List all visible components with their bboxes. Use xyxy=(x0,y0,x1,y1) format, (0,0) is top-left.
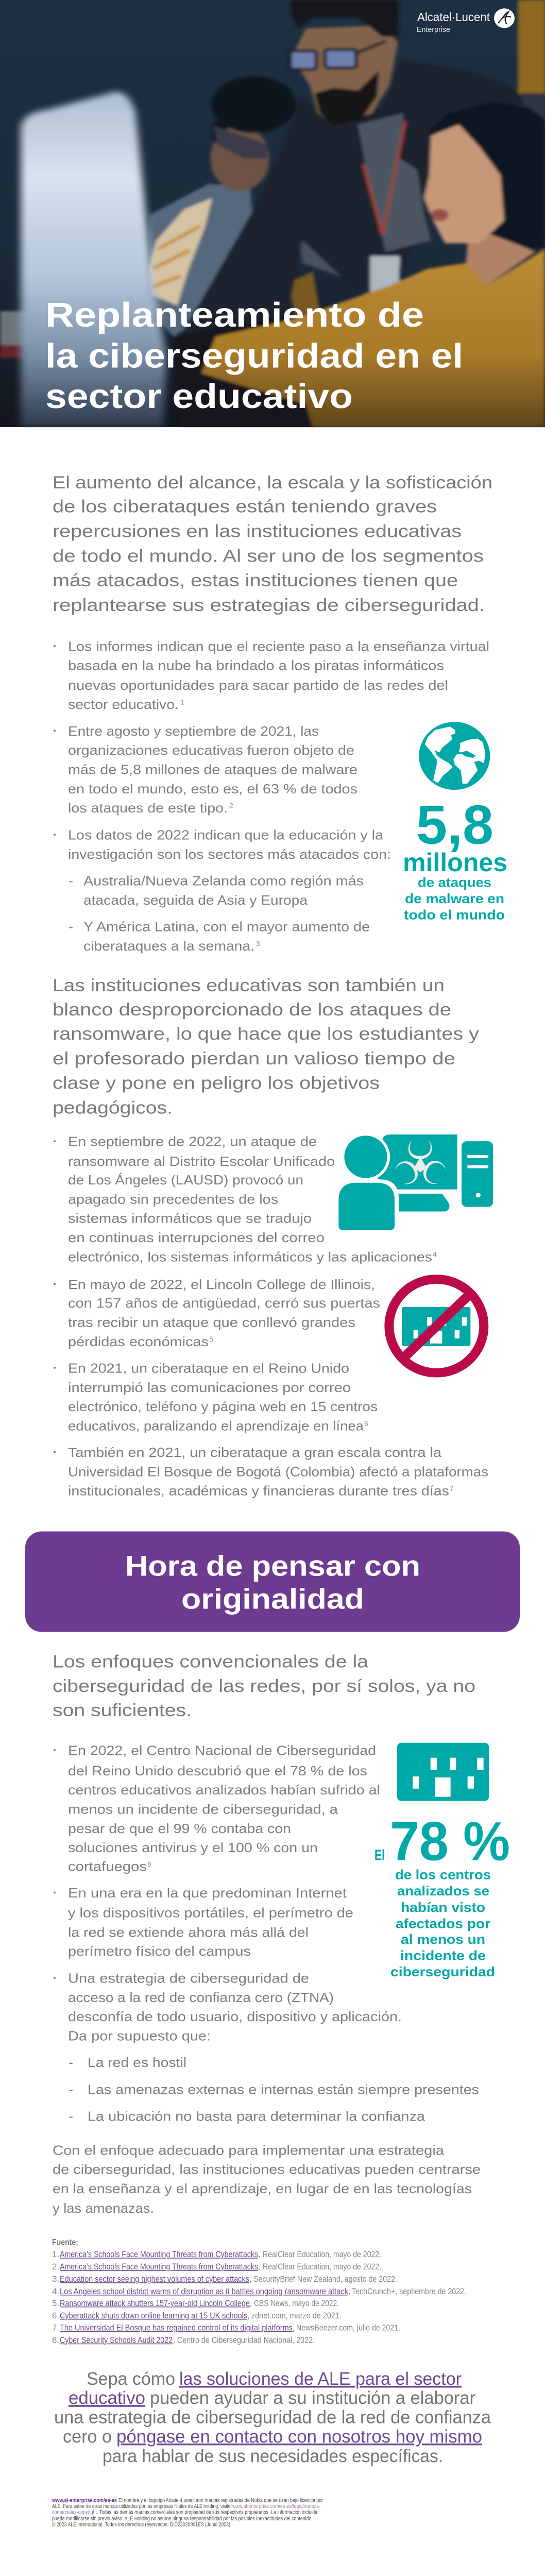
bullet list: zero trust: En 2022, el Centro Nacional de Ciberseguridad xyxy=(68,1743,376,1758)
bullet list: zero trust: del Reino Unido descubrió que el 78 % de los xyxy=(68,1763,367,1778)
stat: 78 %: de los centros xyxy=(395,1867,491,1883)
bullet list: ransomware cases: tras recibir un ataque que conllevó grandes xyxy=(68,1315,355,1330)
call to action: las soluciones de ALE para el sector xyxy=(179,2368,462,2389)
bullet list: attack statistics: ciberataques a la semana. xyxy=(83,938,254,954)
bullet list: zero trust: desconfía de todo usuario, dispositivo y aplicación. xyxy=(68,2009,402,2024)
bullet list: ransomware cases: con 157 años de antigüedad, cerró sus puertas xyxy=(68,1296,380,1311)
stat: 5,8 millones: de ataques xyxy=(418,875,491,890)
bullet list: ransomware cases: Universidad El Bosque de Bogotá (Colombia) afectó a plataformas xyxy=(68,1464,488,1479)
bullet list: zero trust: Las amenazas externas e internas están siempre presentes xyxy=(88,2082,479,2097)
stat: 78 % xyxy=(374,1811,510,1979)
sources list: 7. xyxy=(52,2323,59,2333)
closing paragraph: Con el enfoque adecuado para implementar una estrategia xyxy=(53,2143,444,2158)
section intro: conventional approaches: ciberseguridad de las redes, por sí solos, ya no xyxy=(53,1676,475,1696)
sources list: Cyber Security Schools Audit 2022 xyxy=(60,2335,173,2345)
stat: 78 %: afectados por xyxy=(396,1916,490,1931)
logo: Alcatel-Lucent Enterprise xyxy=(417,8,515,34)
sources list: 6. xyxy=(52,2311,59,2320)
bullet list: zero trust: centros educativos analizados habían sufrido al xyxy=(68,1783,380,1798)
call to action: para hablar de sus necesidades específicas. xyxy=(103,2446,443,2466)
bullet list: ransomware cases: En septiembre de 2022, un ataque de xyxy=(68,1134,317,1149)
bullet list: ransomware cases: En mayo de 2022, el Lincoln College de Illinois, xyxy=(68,1277,375,1292)
sources list: 1. xyxy=(52,2250,59,2259)
bullet list: ransomware cases: apagado sin precedentes de los xyxy=(68,1192,278,1207)
footer legal text: ALE. Para saber de otras marcas utilizadas por las empresas filiales de ALE holding, visite: xyxy=(52,2503,232,2510)
bullet list: zero trust: - xyxy=(69,2082,73,2097)
stat: 78 %: analizados se xyxy=(397,1884,489,1899)
bullet list: zero trust: 8 xyxy=(147,1860,151,1868)
bullet list: zero trust: La red es hostil xyxy=(88,2055,186,2070)
stat: 5,8 millones xyxy=(403,794,507,922)
bullet list: ransomware cases: institucionales, académicas y financieras durante tres días xyxy=(68,1483,449,1499)
sources list: NewsBeezer.com, julio de 2021. xyxy=(296,2323,400,2333)
bullet list: attack statistics: 3 xyxy=(256,940,260,947)
intro paragraph: más atacados, estas instituciones tienen que xyxy=(53,571,458,590)
bullet list: ransomware cases: También en 2021, un ciberataque a gran escala contra la xyxy=(68,1445,441,1460)
bullet list: zero trust: En una era en la que predominan Internet xyxy=(68,1886,347,1901)
call to action: pueden ayudar a su institución a elaborar xyxy=(150,2387,475,2408)
bullet list: ransomware cases: interrumpió las comunicaciones por correo xyxy=(68,1380,351,1395)
intro paragraph: repercusiones en las instituciones educativas xyxy=(53,521,462,541)
banner: Hora de pensar con originalidad: Hora de pensar con xyxy=(125,1551,420,1582)
bullet list: attack statistics: Los informes indican que el reciente paso a la enseñanza virtual xyxy=(68,639,489,654)
sources list: zdnet.com, marzo de 2021. xyxy=(251,2311,342,2320)
footer legal text: puede modificarse sin previo aviso. ALE Holding no asume ninguna responsabilidad por las posibles inexactitudes del contenido. xyxy=(52,2515,313,2522)
intro paragraph xyxy=(53,472,492,615)
stat: 78 %: ciberseguridad xyxy=(390,1964,495,1979)
logo: Alcatel-Lucent Enterprise: Enterprise xyxy=(417,26,450,34)
stat: 5,8 millones: 5,8 xyxy=(416,794,493,856)
sources list: The Universidad El Bosque has regained control of its digital platforms, xyxy=(60,2323,295,2333)
section intro: ransomware: pedagógicos. xyxy=(53,1098,173,1117)
bullet list: attack statistics: - xyxy=(69,873,73,888)
bullet list: attack statistics: nuevas oportunidades para sacar partido de las redes del xyxy=(68,677,448,693)
bullet list: zero trust: menos un incidente de ciberseguridad, a xyxy=(68,1802,338,1817)
bullet list: zero trust: - xyxy=(69,2109,73,2124)
closing paragraph: de ciberseguridad, las instituciones educativas pueden centrarse xyxy=(53,2162,481,2177)
sources list: Ransomware attack shutters 157-year-old Lincoln College, xyxy=(60,2298,252,2308)
bullet list: ransomware cases: sistemas informáticos que se tradujo xyxy=(68,1211,312,1226)
bullet list: attack statistics: en todo el mundo, esto es, el 63 % de todos xyxy=(68,781,357,796)
section intro: ransomware: Las instituciones educativas son también un xyxy=(53,976,445,995)
bullet list: ransomware cases: pérdidas económicas xyxy=(68,1334,209,1349)
bullet list: ransomware cases: de Los Ángeles (LAUSD) provocó un xyxy=(68,1173,303,1188)
logo: Alcatel-Lucent Enterprise: Alcatel·Lucent xyxy=(417,11,490,24)
section intro: ransomware: clase y pone en peligro los objetivos xyxy=(53,1073,380,1093)
bullet list: attack statistics: - xyxy=(69,919,73,934)
bullet list: attack statistics xyxy=(54,639,489,954)
title xyxy=(45,295,463,416)
call to action: educativo xyxy=(69,2387,145,2408)
footer legal text: El nombre y el logotipo Alcatel-Lucent son marcas registradas de Nokia que se usan bajo licencia por xyxy=(118,2497,323,2503)
bullet list: ransomware cases: 6 xyxy=(364,1420,368,1428)
stat: 5,8 millones: de malware en xyxy=(405,891,504,906)
bullet list: attack statistics: Australia/Nueva Zelanda como región más xyxy=(83,873,364,888)
footer legal text: www.al-enterprise.com/es-es xyxy=(52,2497,117,2503)
sources list: 3. xyxy=(52,2274,59,2284)
sources list: RealClear Education, mayo de 2022. xyxy=(263,2262,381,2272)
bullet list: ransomware cases: educativos, paralizando el aprendizaje en línea xyxy=(68,1418,364,1433)
bullet list: zero trust: Una estrategia de ciberseguridad de xyxy=(68,1971,309,1986)
sources list: 8. xyxy=(52,2335,59,2345)
bullet list: attack statistics: los ataques de este tipo. xyxy=(68,801,228,816)
section intro: conventional approaches: son suficientes. xyxy=(53,1701,192,1720)
bullet list: zero trust: La ubicación no basta para determinar la confianza xyxy=(88,2109,425,2124)
bullet list: attack statistics: más de 5,8 millones de ataques de malware xyxy=(68,762,357,777)
footer legal text: © 2023 ALE International. Todos los derechos reservados. DID23020901ES (Junio 2023) xyxy=(52,2521,230,2528)
banner: Hora de pensar con originalidad: originalidad xyxy=(181,1584,364,1615)
sources list: 4. xyxy=(52,2286,59,2296)
bullet list: zero trust xyxy=(54,1743,479,2124)
bullet list: ransomware cases: 5 xyxy=(209,1336,213,1343)
bullet list: zero trust: perímetro físico del campus xyxy=(68,1943,251,1959)
bullet list: ransomware cases: en continuas interrupciones del correo xyxy=(68,1230,325,1245)
title: la ciberseguridad en el xyxy=(45,336,463,375)
call to action: póngase en contacto con nosotros hoy mismo xyxy=(116,2426,482,2447)
bullet list: attack statistics: Y América Latina, con el mayor aumento de xyxy=(83,919,370,934)
footer legal text: www.al-enterprise.com/es-es/legal/marcas- xyxy=(232,2503,320,2510)
bullet list: ransomware cases: 7 xyxy=(450,1485,454,1493)
bullet list: ransomware cases xyxy=(54,1134,488,1499)
bullet list: attack statistics: investigación son los sectores más atacados con: xyxy=(68,847,391,862)
section intro: ransomware: blanco desproporcionado de los ataques de xyxy=(53,1000,451,1020)
icon: user at infected computer xyxy=(335,1133,493,1232)
title: Replanteamiento de xyxy=(45,295,424,334)
closing paragraph: y las amenazas. xyxy=(53,2201,154,2216)
intro paragraph: de todo el mundo. Al ser uno de los segmentos xyxy=(53,546,484,566)
intro paragraph: replantearse sus estrategias de ciberseguridad. xyxy=(53,596,485,615)
intro paragraph: El aumento del alcance, la escala y la sofisticación xyxy=(53,472,492,493)
sources list: , Centro de Ciberseguridad Nacional, 2022. xyxy=(173,2335,315,2345)
bullet list: zero trust: Da por supuesto que: xyxy=(68,2028,211,2043)
section intro: conventional approaches: Los enfoques convencionales de la xyxy=(53,1652,368,1671)
bullet list: attack statistics: 1 xyxy=(180,699,184,706)
call to action: una estrategia de ciberseguridad de la red de confianza xyxy=(54,2406,491,2427)
bullet list: zero trust: cortafuegos xyxy=(68,1859,147,1874)
stat: 78 %: 78 % xyxy=(390,1811,510,1872)
sources list: Los Angeles school district warns of disruption as it battles ongoing ransomware attack, xyxy=(60,2286,350,2296)
sources list: 5. xyxy=(52,2298,59,2308)
sources list xyxy=(52,2238,466,2345)
bullet list: attack statistics: Entre agosto y septiembre de 2021, las xyxy=(68,723,319,739)
footer legal text: comerciales-copyright xyxy=(52,2509,97,2515)
sources list: RealClear Education, mayo de 2022. xyxy=(263,2250,381,2259)
section intro: ransomware: ransomware, lo que hace que los estudiantes y xyxy=(53,1024,479,1044)
bullet list: ransomware cases: En 2021, un ciberataque en el Reino Unido xyxy=(68,1361,349,1376)
stat: 78 %: habían visto xyxy=(401,1900,485,1915)
bullet list: ransomware cases: ransomware al Distrito Escolar Unificado xyxy=(68,1154,335,1169)
section intro: conventional approaches xyxy=(53,1652,475,1720)
bullet list: zero trust: la red se extiende ahora más allá del xyxy=(68,1925,309,1940)
bullet list: attack statistics: Los datos de 2022 indican que la educación y la xyxy=(68,827,383,843)
call to action xyxy=(54,2368,491,2466)
biohazard symbol xyxy=(393,1140,448,1187)
footer legal text xyxy=(52,2497,323,2528)
sources list: Fuente: xyxy=(52,2238,78,2247)
footer legal text: . Todas las demás marcas comerciales son propiedad de sus respectivos propietarios. La información incluida xyxy=(97,2509,317,2515)
bullet list: zero trust: acceso a la red de confianza cero (ZTNA) xyxy=(68,1990,334,2005)
sources list: Education sector seeing highest volumes of cyber attacks, xyxy=(60,2274,251,2284)
section intro: ransomware: el profesorado pierdan un valioso tiempo de xyxy=(53,1048,455,1069)
icon: school building xyxy=(397,1743,489,1801)
intro paragraph: de los ciberataques están teniendo graves xyxy=(53,497,437,516)
closing paragraph xyxy=(53,2143,481,2216)
stat: 78 %: incidente de xyxy=(400,1948,486,1963)
sources list: Cyberattack shuts down online learning at 15 UK schools, xyxy=(60,2311,249,2320)
icon: closed school xyxy=(389,1279,484,1373)
bullet list: zero trust: - xyxy=(69,2055,73,2070)
sources list: America’s Schools Face Mounting Threats from Cyberattacks, xyxy=(60,2262,260,2272)
bullet list: attack statistics: organizaciones educativas fueron objeto de xyxy=(68,743,354,758)
call to action: cero o xyxy=(63,2426,112,2447)
stat: 5,8 millones: millones xyxy=(403,848,507,877)
closing paragraph: en la enseñanza y el aprendizaje, en lugar de en las tecnologías xyxy=(53,2181,472,2196)
sources list: America’s Schools Face Mounting Threats from Cyberattacks, xyxy=(60,2250,260,2259)
call to action: Sepa cómo xyxy=(87,2368,175,2389)
sources list: CBS News, mayo de 2022. xyxy=(254,2298,339,2308)
icon: globe xyxy=(419,722,490,790)
bullet list: attack statistics: atacada, seguida de Asia y Europa xyxy=(83,892,308,908)
sources list: 2. xyxy=(52,2262,59,2272)
sources list: TechCrunch+, septiembre de 2022. xyxy=(352,2286,466,2296)
stat: 5,8 millones: todo el mundo xyxy=(404,907,505,922)
bullet list: attack statistics: basada en la nube ha brindado a los piratas informáticos xyxy=(68,658,444,673)
stat: 78 %: al menos un xyxy=(401,1931,485,1947)
bullet list: ransomware cases: electrónico, teléfono y página web en 15 centros xyxy=(68,1399,378,1414)
title: sector educativo xyxy=(45,377,353,416)
hero photo: three people at a computer xyxy=(0,0,545,427)
bullet list: zero trust: pesar de que el 99 % contaba con xyxy=(68,1821,291,1836)
bullet list: attack statistics: 2 xyxy=(229,802,233,809)
bullet list: ransomware cases: 4 xyxy=(433,1251,437,1259)
section intro: ransomware xyxy=(53,976,479,1117)
bullet list: zero trust: soluciones antivirus y el 100 % con un xyxy=(68,1840,318,1855)
bullet list: attack statistics: sector educativo. xyxy=(68,697,179,712)
stat: 78 %: El xyxy=(374,1847,385,1863)
bullet list: ransomware cases: electrónico, los sistemas informáticos y las aplicaciones xyxy=(68,1249,432,1264)
bullet list: zero trust: y los dispositivos portátiles, el perímetro de xyxy=(68,1905,353,1920)
sources list: SecurityBrief New Zealand, agosto de 2022. xyxy=(253,2274,397,2284)
banner: Hora de pensar con originalidad xyxy=(25,1531,520,1632)
